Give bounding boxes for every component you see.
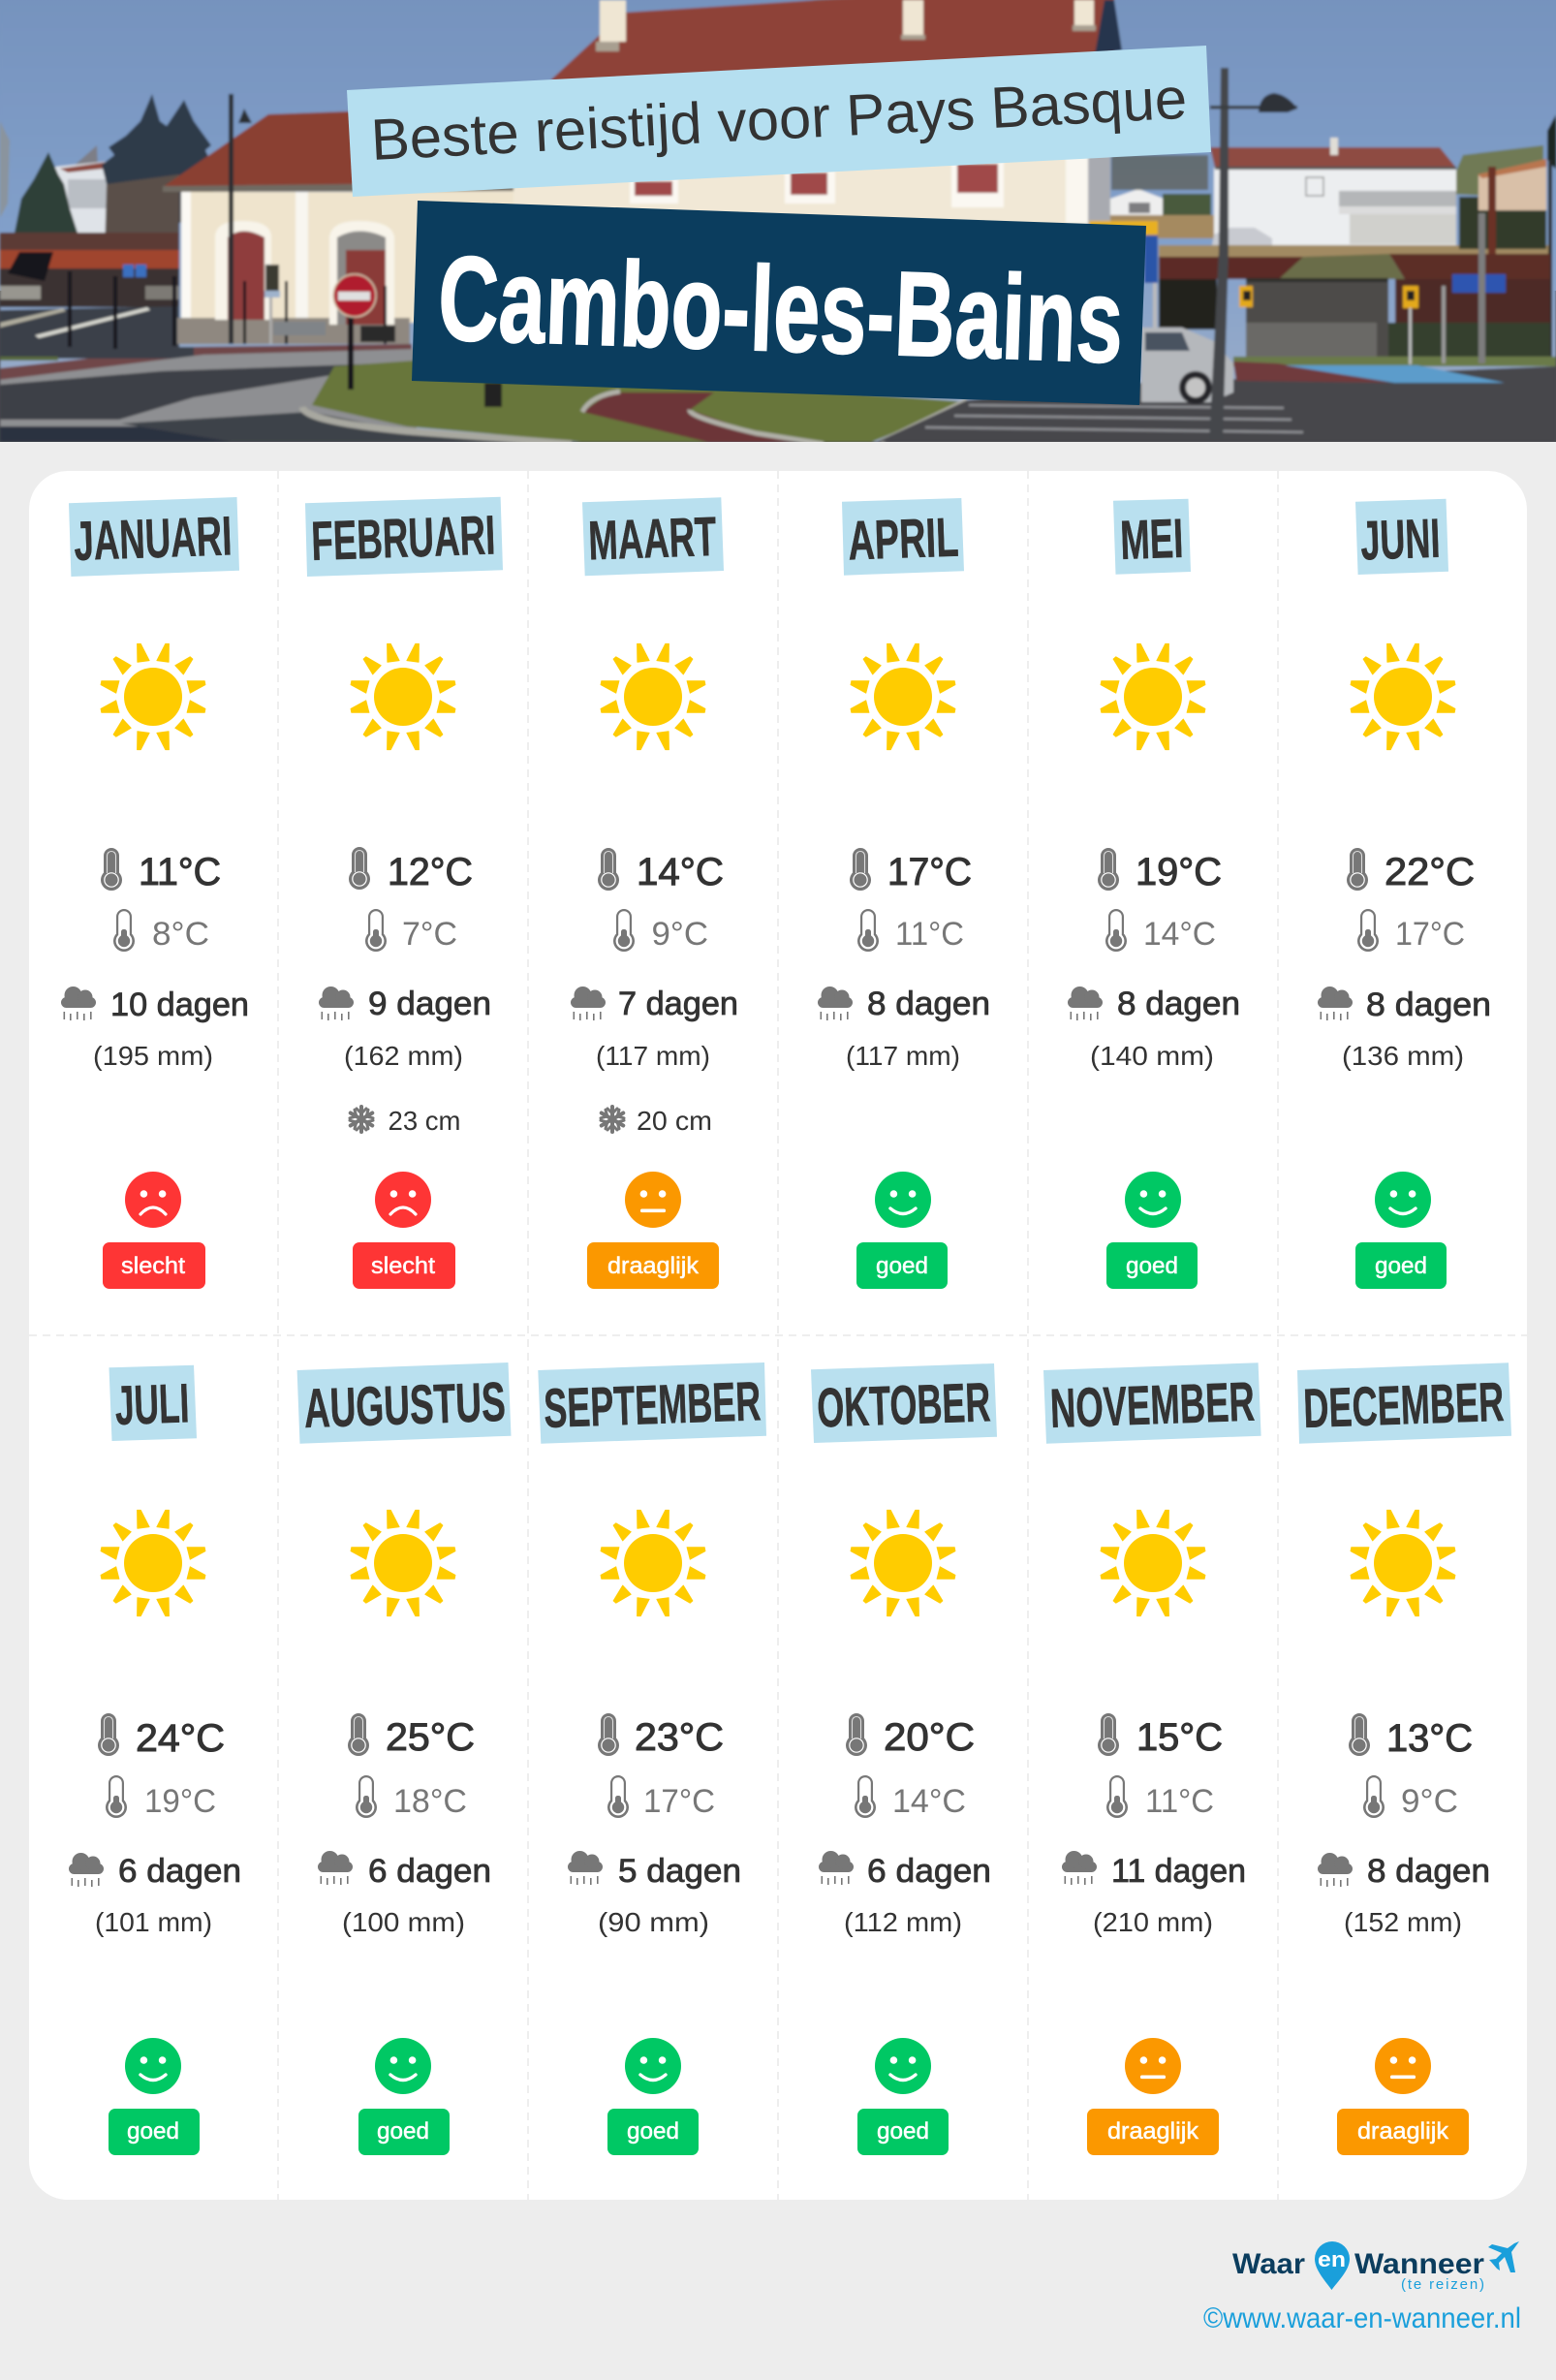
min temperature: 8°C [152,916,209,953]
icon: rain cloud [819,1851,854,1885]
icon: thermometer low [855,1775,876,1818]
icon: rain cloud [571,986,606,1020]
icon: sun [601,1510,705,1616]
heading: augustus: AUGUSTUS [303,1371,507,1440]
rating: goed: goed [127,2118,179,2145]
heading: september [538,1362,766,1444]
rating: goed: goed [1375,1253,1427,1279]
icon: thermometer low [356,1775,377,1818]
icon: thermometer high [598,848,619,891]
rainfall: (90 mm) [598,1907,709,1937]
icon: thermometer low [613,909,635,952]
max temperature: 12°C [388,851,473,893]
min temperature: 7°C [402,916,457,953]
icon: neutral face [1375,2038,1431,2094]
heading: juli: JULI [114,1372,190,1437]
rainfall: (117 mm) [596,1041,710,1071]
month: februari [305,497,503,1289]
snowfall: 23 cm [388,1106,461,1136]
icon: thermometer low [1363,1775,1385,1818]
month: april [818,498,990,1289]
icon: rain cloud [1318,1853,1353,1887]
month: augustus [297,1362,512,2155]
icon: thermometer low [106,1775,127,1818]
rain days: 8 dagen [1367,1853,1490,1890]
icon: thermometer high [850,848,871,891]
heading: maart [582,497,724,576]
month: september [538,1362,766,2155]
icon: thermometer low [1105,909,1127,952]
icon: good face [875,1172,931,1228]
max temperature: 17°C [887,851,972,893]
heading: augustus [297,1362,512,1444]
max temperature: 14°C [637,851,724,893]
rating: goed: goed [377,2118,429,2145]
icon: sun [1101,643,1205,750]
month: oktober [811,1363,997,2155]
heading: september: SEPTEMBER [543,1370,762,1440]
logo: Waar en Wanneer: (te reizen) [1401,2276,1484,2293]
icon: thermometer high [98,1713,119,1756]
heading: januari: JANUARI [73,505,233,573]
icon: good face [375,2038,431,2094]
title banner: Beste reistijd voor Pays Basque [347,46,1211,197]
heading: november [1043,1362,1261,1444]
rating: goed [607,2109,699,2155]
month: maart [571,497,738,1289]
rainfall: (136 mm) [1342,1041,1464,1071]
title banner: Beste reistijd voor Pays Basque: Beste reistijd voor Pays Basque [369,66,1189,172]
rainfall: (112 mm) [844,1907,962,1937]
month: juli [69,1365,241,2155]
heading: juni [1355,499,1448,575]
max temperature: 15°C [1136,1716,1223,1759]
heading: mei [1113,499,1191,575]
icon: sun [351,643,455,750]
min temperature: 14°C [1143,916,1216,953]
rating: goed: goed [876,1253,928,1279]
rainfall: (195 mm) [93,1041,213,1071]
icon: rain cloud [318,1851,353,1885]
rating: goed: goed [627,2118,679,2145]
min temperature: 14°C [892,1783,966,1820]
snowfall: 20 cm [637,1106,712,1136]
min temperature: 18°C [393,1783,467,1820]
rating: slecht [353,1242,455,1289]
icon: sun [101,643,205,750]
heading: november: NOVEMBER [1049,1371,1256,1440]
icon: thermometer low [1106,1775,1128,1818]
icon: sun [1101,1510,1205,1616]
rain days: 5 dagen [618,1853,741,1890]
rain days: 6 dagen [118,1853,241,1890]
rain days: 6 dagen [867,1853,991,1890]
icon: rain cloud [1318,986,1353,1020]
rain days: 6 dagen [368,1853,491,1890]
rating: goed [1106,1242,1198,1289]
icon: thermometer high [846,1713,867,1756]
icon: thermometer high [101,848,122,891]
rating: slecht: slecht [121,1253,185,1279]
max temperature: 25°C [386,1716,475,1759]
icon: sun [351,1510,455,1616]
icon: thermometer high [349,847,370,890]
icon: bad face [375,1172,431,1228]
max temperature: 13°C [1386,1717,1473,1760]
heading: juni: JUNI [1359,508,1441,572]
title banner: Cambo-les-Bains: Cambo-les-Bains [436,232,1125,389]
max temperature: 24°C [136,1717,225,1760]
icon: rain cloud [1062,1851,1097,1885]
rainfall: (152 mm) [1344,1907,1462,1937]
heading: januari [69,497,239,577]
logo: Waar en Wanneer: Wanneer [1354,2248,1484,2280]
icon: sun [101,1510,205,1616]
rating: goed: goed [1126,1253,1178,1279]
icon: thermometer high [348,1713,369,1756]
icon: good face [875,2038,931,2094]
rating: goed [109,2109,200,2155]
rating: draaglijk: draaglijk [1107,2118,1199,2145]
min temperature: 17°C [1395,916,1465,953]
heading: mei: MEI [1119,508,1184,572]
icon: thermometer low [1357,909,1379,952]
min temperature: 19°C [144,1783,216,1820]
logo: Waar en Wanneer [1232,2241,1519,2293]
rating: goed [857,2109,949,2155]
heading: april: APRIL [847,507,959,572]
min temperature: 9°C [651,916,708,953]
panel: white climate table [29,471,1527,2200]
icon: neutral face [1125,2038,1181,2094]
rainfall: (140 mm) [1090,1041,1214,1071]
min temperature: 9°C [1401,1783,1458,1820]
title banner: Cambo-les-Bains [412,201,1146,405]
rain days: 8 dagen [867,986,990,1022]
min temperature: 11°C [895,916,964,953]
rainfall: (162 mm) [344,1041,463,1071]
icon: thermometer high [1347,848,1368,891]
rating: slecht: slecht [371,1253,435,1279]
icon: thermometer high [1098,1713,1119,1756]
icon: sun [1351,643,1455,750]
rainfall: (101 mm) [95,1907,212,1937]
icon: rain cloud [818,986,853,1020]
icon: good face [125,2038,181,2094]
heading: juli [109,1365,197,1441]
rating: goed [358,2109,450,2155]
month: juni [1318,499,1491,1289]
icon: thermometer high [1098,848,1119,891]
heading: februari: FEBRUARI [310,504,496,573]
logo: Waar en Wanneer: en [1318,2247,1346,2271]
icon: thermometer low [857,909,879,952]
rating: draaglijk [1087,2109,1219,2155]
icon: rain cloud [61,986,96,1020]
icon: good face [1125,1172,1181,1228]
icon: neutral face [625,1172,681,1228]
max temperature: 11°C [139,851,221,893]
max temperature: 22°C [1385,851,1475,893]
rating: draaglijk: draaglijk [607,1253,700,1279]
heading: oktober [811,1363,997,1443]
icon: thermometer low [365,909,387,952]
month: december [1297,1362,1511,2155]
icon: good face [1375,1172,1431,1228]
heading: april [842,498,964,576]
rating: goed [856,1242,948,1289]
rating: slecht [103,1242,205,1289]
rating: goed [1355,1242,1447,1289]
rating: goed: goed [877,2118,929,2145]
icon: snowflake [599,1107,626,1132]
icon: thermometer low [113,909,135,952]
icon: rain cloud [319,986,354,1020]
month: januari [61,497,249,1289]
heading: oktober: OKTOBER [816,1371,991,1439]
rating: draaglijk [587,1242,719,1289]
icon: rain cloud [568,1851,603,1885]
rain days: 11 dagen [1111,1853,1246,1890]
rain days: 7 dagen [618,986,738,1022]
website url: ©www.waar-en-wanneer.nl [1203,2302,1521,2334]
icon: sun [851,643,955,750]
icon: good face [625,2038,681,2094]
rainfall: (100 mm) [342,1907,465,1937]
rain days: 8 dagen [1366,986,1491,1023]
month: mei [1068,499,1240,1289]
logo: Waar en Wanneer: Waar [1232,2248,1305,2280]
icon: sun [851,1510,955,1616]
rainfall: (117 mm) [846,1041,960,1071]
rain days: 8 dagen [1117,986,1240,1022]
heading: maart: MAART [587,506,717,572]
photo: Cambo-les-Bains station square [0,0,1556,444]
rain days: 9 dagen [368,986,491,1022]
icon: airplane [1488,2241,1519,2272]
icon: rain cloud [1068,986,1103,1020]
rainfall: (210 mm) [1093,1907,1213,1937]
min temperature: 11°C [1145,1783,1214,1820]
max temperature: 19°C [1136,851,1222,893]
icon: rain cloud [69,1853,104,1887]
rating: draaglijk [1337,2109,1469,2155]
icon: thermometer high [598,1713,619,1756]
max temperature: 23°C [635,1716,724,1759]
icon: thermometer low [607,1775,629,1818]
icon: map pin [1315,2241,1350,2290]
month: november [1043,1362,1261,2155]
icon: sun [601,643,705,750]
icon: sun [1351,1510,1455,1616]
icon: thermometer high [1349,1713,1370,1756]
max temperature: 20°C [884,1716,975,1759]
heading: februari [305,497,503,577]
icon: bad face [125,1172,181,1228]
rain days: 10 dagen [110,986,249,1023]
min temperature: 17°C [643,1783,715,1820]
rating: draaglijk: draaglijk [1357,2118,1449,2145]
icon: snowflake [348,1107,375,1132]
